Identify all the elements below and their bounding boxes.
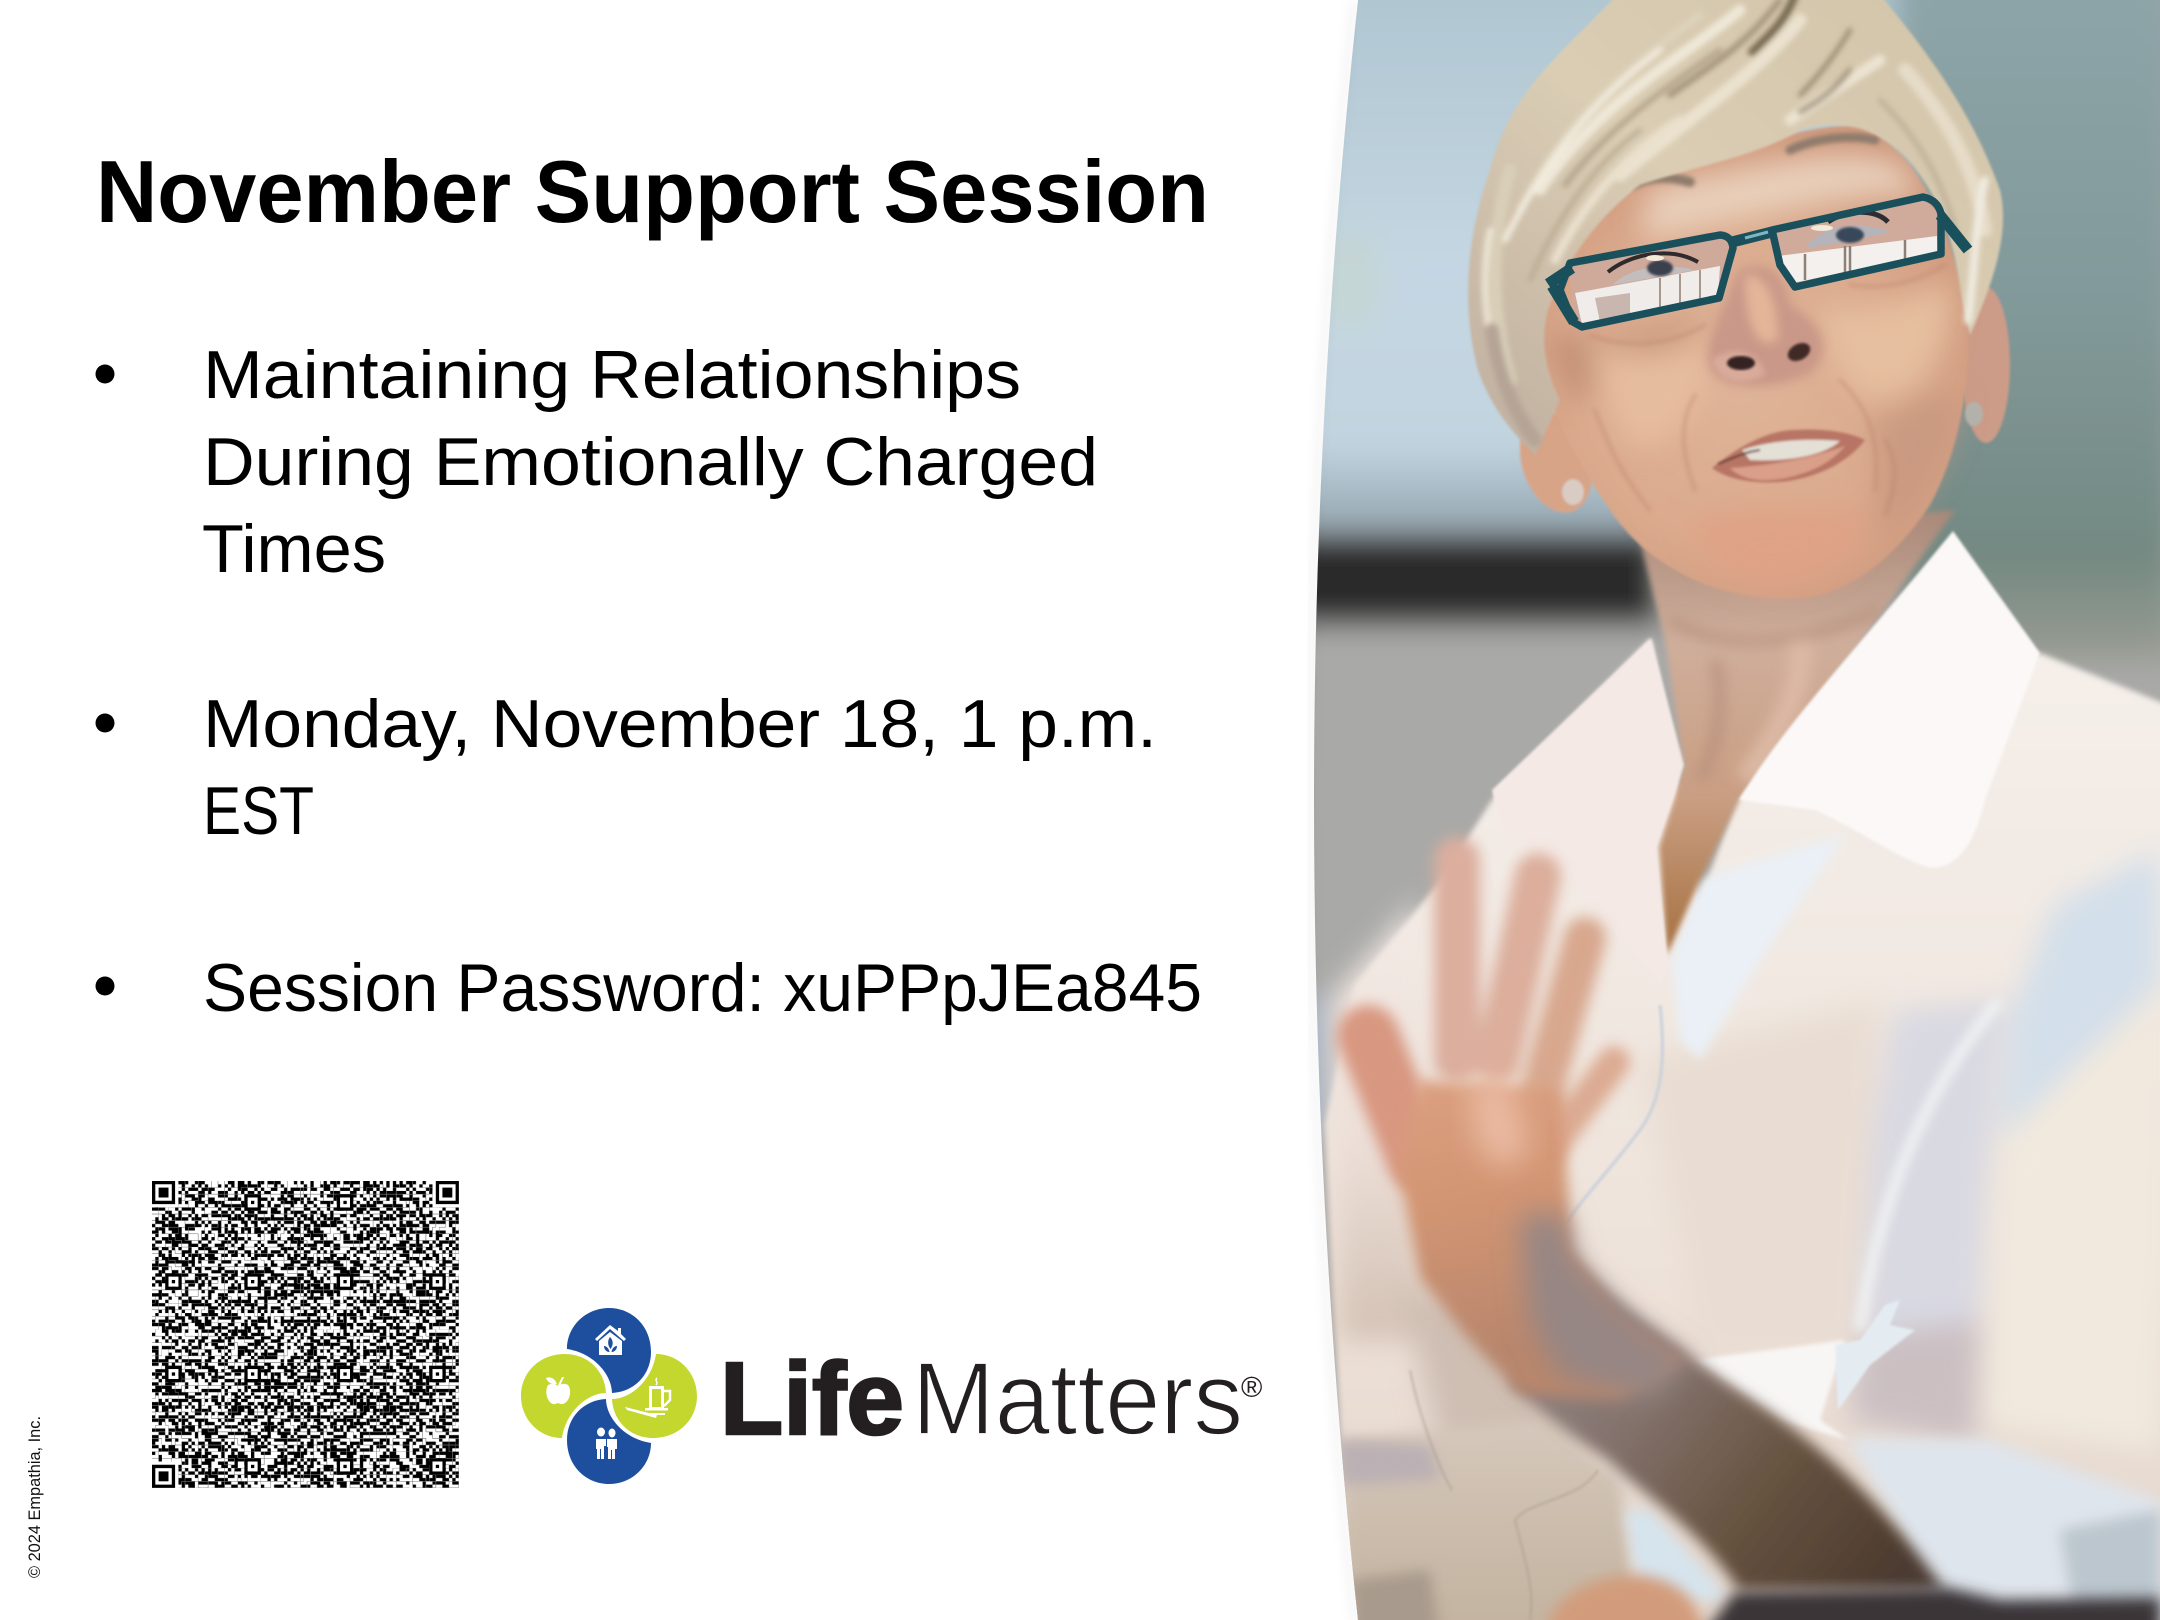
- wordmark: ®: [1241, 1372, 1262, 1404]
- bullet list: [96, 337, 1202, 1026]
- bullet: session topic: During Emotionally Charged: [203, 424, 1098, 500]
- white cuff pinch: [1835, 1300, 1915, 1410]
- bullet: session password: Session Password: xuPPpJEa845: [203, 950, 1202, 1026]
- photo: woman speaking and gesturing: [1280, 0, 2160, 1620]
- bullet: session topic: Times: [202, 511, 386, 587]
- gray wrist: [1520, 1215, 1690, 1400]
- QR code: [149, 1178, 462, 1491]
- bullet: date and time: Monday, November 18, 1 p.m.: [203, 686, 1157, 762]
- side seam: [1860, 1000, 2000, 1330]
- hand: [1368, 860, 1690, 1400]
- left collar: [1492, 638, 1684, 985]
- right lens: [1775, 200, 1938, 283]
- icon: house with plant: [595, 1325, 626, 1355]
- palm: [1398, 1080, 1687, 1400]
- logo mark: four interlocking petals: [521, 1308, 697, 1484]
- right collar: [1739, 531, 2040, 868]
- bullet: session topic: [96, 337, 1098, 587]
- bullet: session topic: Maintaining Relationships: [203, 337, 1021, 413]
- dark foreground: [1700, 1588, 2160, 1620]
- hem stitching: [1410, 1370, 1598, 1620]
- earrings: [1562, 402, 1983, 505]
- title: November Support Session: [96, 142, 1209, 241]
- icon: apple: [546, 1377, 570, 1404]
- ears: [1508, 287, 2010, 522]
- wrinkles: [1590, 265, 1945, 515]
- wordmark: Life: [720, 1341, 904, 1456]
- eyebrows: [1632, 137, 1875, 185]
- icon: two people: [596, 1428, 617, 1459]
- frame: [1560, 197, 1941, 327]
- left lens: [1570, 238, 1732, 327]
- shirt placket seam: [1567, 1005, 1663, 1222]
- sleeve tones: [2000, 850, 2160, 1140]
- photo edge shadow: [1310, 0, 1354, 1620]
- woman's neck: [1640, 510, 1955, 955]
- woman's shirt: [1325, 638, 2160, 1620]
- wordmark: [720, 1341, 1262, 1456]
- hand at bottom edge: [1545, 1575, 1705, 1620]
- LifeMatters logo: [521, 1308, 1262, 1484]
- bullet: date and time: [96, 686, 1157, 849]
- neck shading: [1670, 610, 1880, 780]
- face: [1530, 125, 1968, 598]
- palm highlight: [1470, 1080, 1530, 1170]
- wordmark: Matters: [912, 1341, 1243, 1456]
- nose: [1708, 266, 1823, 386]
- hair strands: [1485, 0, 1985, 440]
- photo background: [1280, 0, 2160, 1620]
- icon: mug and pencil: [625, 1378, 670, 1418]
- glasses: [1548, 197, 1968, 327]
- bullet: date and time: EST: [203, 773, 314, 849]
- copyright note: © 2024 Empathia, Inc.: [25, 1416, 44, 1578]
- mouth: [1712, 429, 1865, 482]
- hair: [1468, 0, 2003, 455]
- face shading: [1548, 155, 1960, 586]
- forearm: [1510, 1250, 1945, 1590]
